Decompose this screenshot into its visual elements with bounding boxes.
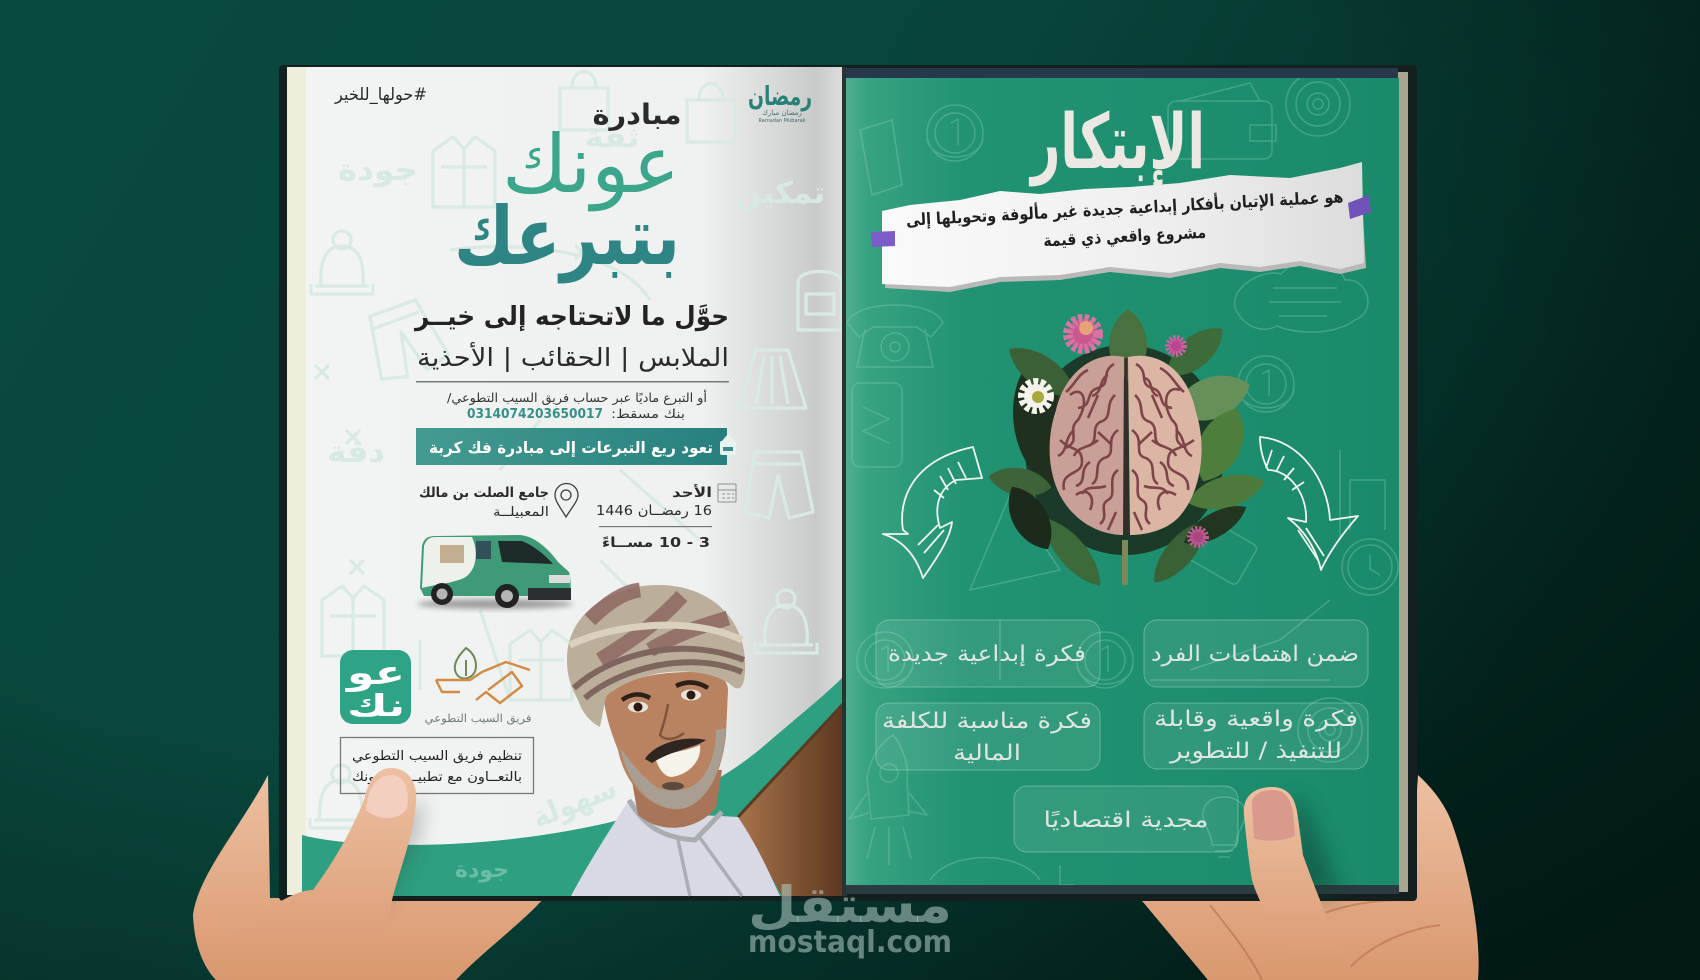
pattern words: ثقة	[584, 121, 640, 154]
bottom band	[846, 885, 1399, 894]
leaves	[986, 309, 1269, 595]
card: economically viable: مجدية اقتصاديًا	[1044, 808, 1208, 833]
icon: map pin	[555, 484, 578, 517]
donation text: أو التبرع ماديًا عبر حساب فريق السيب التطوعي/	[447, 389, 707, 406]
hashtag: #حولها_للخير	[334, 85, 427, 105]
torn paper callout: مشروع واقعي ذي قيمة	[1043, 223, 1207, 251]
cardboard box	[738, 704, 843, 896]
location block: المعبيلــة	[493, 505, 549, 520]
organizer box	[340, 738, 534, 794]
organizer box: بالتعــاون مع تطبيــق عــونك	[352, 770, 522, 785]
card: suitable cost	[876, 703, 1100, 770]
book cover	[279, 65, 1417, 901]
logo: awnak: نك	[347, 689, 405, 724]
Ramadan logo: Ramadan Mubarak	[758, 118, 806, 124]
location block: جامع الصلت بن مالك	[419, 485, 549, 501]
brain illustration	[986, 309, 1269, 595]
card: realistic idea: فكرة واقعية وقابلة	[1154, 707, 1358, 732]
purple tape left	[871, 231, 895, 247]
man photo	[567, 585, 780, 896]
green swoosh	[302, 677, 843, 896]
brain folds	[1058, 358, 1194, 534]
feature cards	[876, 620, 1368, 852]
heading: initiative: مبادرة	[592, 98, 682, 131]
card: realistic idea	[1144, 703, 1368, 769]
pattern words: دقة	[327, 435, 385, 470]
card: suitable cost: المالية	[953, 741, 1021, 766]
watermark: mostaql.com	[748, 925, 952, 960]
right thumb	[1244, 787, 1358, 980]
heading: innovation: الإبتكار	[1028, 97, 1205, 187]
pattern words: تمكين	[735, 176, 825, 211]
bank account	[467, 406, 685, 422]
torn paper callout	[871, 162, 1371, 292]
thumbnail	[366, 775, 408, 818]
right hand behind the book	[1138, 775, 1479, 980]
thumbnail	[1252, 790, 1295, 841]
logotype: betabaruk: بتبرعك	[454, 190, 680, 284]
neck	[630, 770, 722, 828]
moustache and smile	[645, 739, 706, 790]
rule	[416, 381, 729, 382]
background doodle pattern	[847, 72, 1398, 885]
brain hemispheres	[1050, 356, 1124, 535]
watermark: مستقل	[748, 876, 952, 934]
card: suitable cost: فكرة مناسبة للكلفة	[882, 709, 1092, 734]
top band	[846, 68, 1398, 79]
date block: 16 رمضــان 1446	[596, 503, 712, 519]
banner: تعود ريع التبرعات إلى مبادرة فك كربة	[429, 438, 713, 457]
logo: awnak: عو	[344, 653, 405, 693]
logotype: awnak: عونك	[502, 118, 680, 212]
van	[417, 535, 573, 609]
turban	[567, 585, 745, 727]
date block: الأحد	[672, 484, 712, 501]
date block	[596, 484, 712, 551]
logo: Al Seeb team	[424, 648, 532, 726]
torn paper callout: هو عملية الإتيان بأفكار إبداعية جديدة غير مألوفة وتحويلها إلى	[905, 186, 1344, 231]
pattern words: جودة	[338, 153, 418, 188]
icon: calendar	[718, 484, 736, 502]
arrow left	[883, 447, 982, 578]
pattern words	[327, 121, 825, 836]
card: within individual interests: ضمن اهتمامات الفرد	[1151, 642, 1359, 667]
beard	[620, 728, 726, 809]
icon: gift box	[720, 434, 736, 455]
card: within individual interests	[1144, 620, 1368, 687]
arrow right	[1260, 437, 1358, 570]
background doodle pattern	[310, 72, 842, 828]
organizer box: تنظيم فريق السيب التطوعي	[352, 749, 522, 764]
Ramadan logo	[748, 82, 812, 124]
left hand behind the book	[193, 775, 544, 980]
page paper	[306, 67, 843, 896]
items line: الملابس | الحقائب | الأحذية	[417, 341, 729, 372]
gutter shadow	[842, 67, 847, 896]
pattern words: سهولة	[527, 770, 622, 836]
page edges	[287, 67, 311, 895]
bank account: 0314074203650017	[467, 407, 603, 422]
logo: awnak	[340, 650, 411, 724]
robe	[571, 800, 780, 896]
location block	[419, 485, 549, 520]
left thumb	[205, 768, 424, 980]
banner	[416, 428, 736, 465]
page edges	[1395, 72, 1408, 892]
eyes and brows	[622, 682, 708, 739]
card: economically viable	[1014, 786, 1238, 852]
swoosh word: جودة	[455, 858, 509, 883]
card: realistic idea: للتنفيذ / للتطوير	[1169, 739, 1342, 764]
logo: Al Seeb team: فريق السيب التطوعي	[424, 712, 532, 726]
watermark	[748, 876, 952, 960]
card: new creative idea: فكرة إبداعية جديدة	[888, 642, 1086, 667]
Ramadan logo: رمضان مبارك	[762, 109, 802, 117]
headline: حوَّل ما لاتحتاجه إلى خيــر	[413, 302, 729, 332]
date block: 3 - 10 مســاءً	[602, 535, 710, 551]
panel: left page	[287, 67, 843, 896]
Ramadan logo: رمضان	[748, 82, 812, 112]
card: new creative idea	[876, 620, 1100, 687]
purple tape right	[1348, 195, 1371, 219]
face	[604, 672, 728, 809]
flowers	[1024, 319, 1206, 545]
green paper	[846, 78, 1399, 885]
panel: right page	[846, 68, 1408, 894]
bank account: بنك مسقط:	[611, 406, 685, 421]
